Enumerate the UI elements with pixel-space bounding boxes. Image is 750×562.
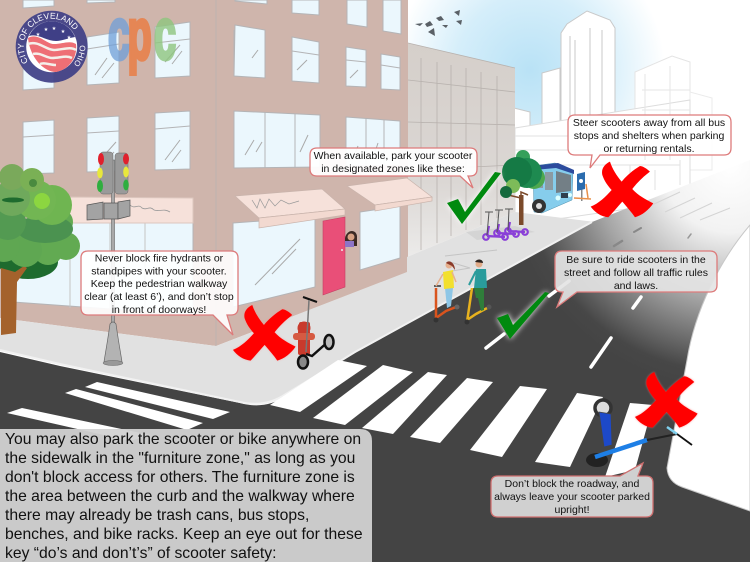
street signs [87, 200, 130, 220]
black scooter [298, 297, 334, 368]
callout: ride in street: Be sure to ride scooters in the [566, 254, 706, 266]
callout: bus stops: Steer scooters away from all bus [573, 117, 725, 129]
grey side building [407, 43, 515, 257]
bus stop sign [577, 172, 585, 201]
person in doorway [345, 231, 357, 247]
crosswalk left [7, 382, 230, 441]
woman rider [434, 261, 460, 322]
riders [434, 259, 492, 324]
curb [0, 222, 592, 404]
cross: roadway [635, 372, 698, 428]
awning right [347, 178, 432, 211]
street tree [500, 150, 545, 225]
callout: roadway: always leave your scooter parked [494, 491, 650, 503]
skyline buildings [514, 11, 712, 225]
storefront left [13, 197, 193, 315]
traffic light pole [103, 160, 123, 366]
logo: cpc [108, 0, 176, 75]
road [0, 160, 750, 562]
callout: fire hydrants: Keep the pedestrian walkway [91, 278, 228, 290]
storefront right [233, 206, 400, 307]
blue fallen scooter [586, 400, 692, 467]
callout: fire hydrants: standpipes with your scooter. [91, 266, 227, 278]
door [323, 217, 345, 295]
check: designated zones [447, 172, 501, 224]
bus [532, 163, 574, 213]
logo: City of Cleveland seal: ★ [52, 26, 57, 32]
building corner line [215, 0, 217, 346]
man rider [464, 259, 492, 324]
road sketch lines [652, 192, 730, 220]
logo: City of Cleveland seal: ★ [36, 32, 41, 38]
callout: designated zones [310, 148, 477, 188]
cross: hydrant [233, 305, 296, 361]
callout: designated zones: When available, park your scooter [314, 150, 473, 162]
callout: roadway: Don’t block the roadway, and [505, 478, 639, 490]
lane dashes [486, 228, 691, 367]
traffic signal [97, 152, 129, 194]
orange scooter [574, 184, 591, 199]
callout: designated zones: in designated zones like these: [321, 163, 465, 175]
sidewalk markings [445, 250, 497, 272]
panel: furniture zone text: key “do’s and don’t’s” of scooter safety: [5, 545, 276, 562]
logo: City of Cleveland seal: OHIO [74, 46, 86, 66]
callout: fire hydrants: in front of doorways! [112, 304, 206, 316]
callout: fire hydrants: Never block fire hydrants or [95, 252, 224, 264]
callout: roadway: upright! [554, 504, 590, 516]
logo: City of Cleveland seal: ★ [67, 35, 72, 41]
callout: fire hydrants: clear (at least 6’), and don’t stop [84, 291, 234, 303]
crosswalk right [270, 360, 653, 477]
purple parked scooters [466, 209, 535, 240]
callout: bus stops [568, 115, 731, 168]
callout: bus stops: or returning rentals. [603, 143, 695, 155]
check: ride in street [497, 292, 549, 339]
panel: furniture zone text: the area between the curb and the walkway where [5, 488, 355, 505]
callout: ride in street: and laws. [614, 280, 658, 292]
logo: City of Cleveland seal: ★ [61, 29, 66, 35]
logo: City of Cleveland seal: CITY OF CLEVELAND [18, 12, 78, 64]
callout: fire hydrants [81, 251, 238, 335]
panel: furniture zone text [0, 429, 372, 562]
pink main building [0, 0, 408, 346]
panel: furniture zone text: don't block access for others. The furniture zone is [5, 469, 355, 486]
panel: furniture zone text: the sidewalk in the "furniture zone," as long as you [5, 450, 355, 467]
logo: City of Cleveland seal: ★ [44, 27, 49, 33]
panel: furniture zone text: benches, and bike racks. Keep an eye out for these [5, 526, 363, 543]
panel: furniture zone text: there may already be trash cans, bus stops, [5, 507, 309, 524]
fire hydrant [293, 322, 315, 355]
logo: City of Cleveland seal [16, 10, 88, 83]
callout: roadway [491, 463, 653, 517]
left tree [0, 164, 80, 335]
callout: ride in street [555, 251, 717, 307]
sidewalk [0, 212, 595, 404]
birds [415, 10, 462, 36]
callout: ride in street: street and follow all traffic rules [564, 267, 708, 279]
cross: bus stops [591, 162, 653, 217]
callout: bus stops: stops and shelters when parking [574, 130, 724, 142]
awning left [235, 189, 345, 228]
upper windows [23, 0, 401, 174]
right sidewalk [667, 225, 750, 511]
panel: furniture zone text: You may also park the scooter or bike anywhere on [5, 431, 361, 448]
